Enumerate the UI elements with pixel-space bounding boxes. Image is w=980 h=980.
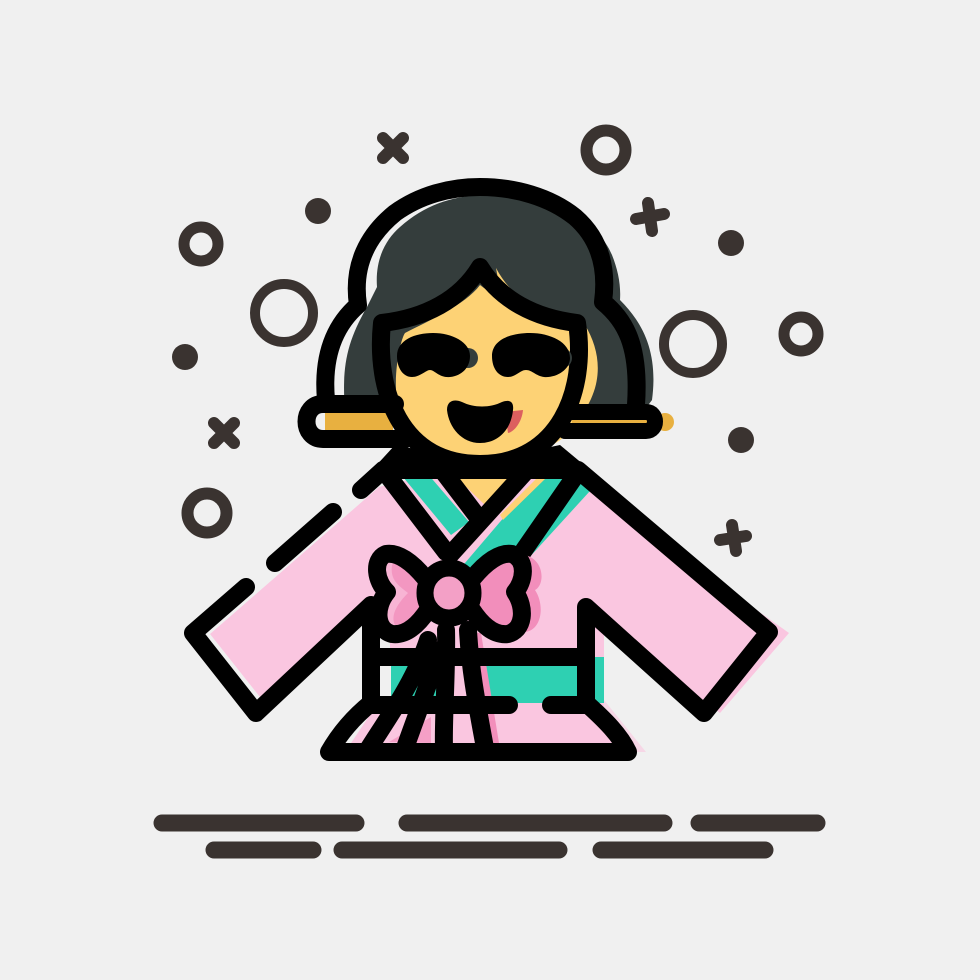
kimono outline <box>193 470 769 752</box>
ground lines <box>162 823 817 850</box>
face fill <box>396 285 598 458</box>
decorative particles <box>172 130 818 551</box>
eyes <box>397 333 572 377</box>
mouth <box>447 401 523 443</box>
kimono fills <box>210 473 789 752</box>
neck shadow <box>372 445 590 470</box>
bow <box>377 554 542 634</box>
hair fill <box>344 194 653 412</box>
hair stick <box>306 404 674 439</box>
head outline <box>325 187 637 464</box>
